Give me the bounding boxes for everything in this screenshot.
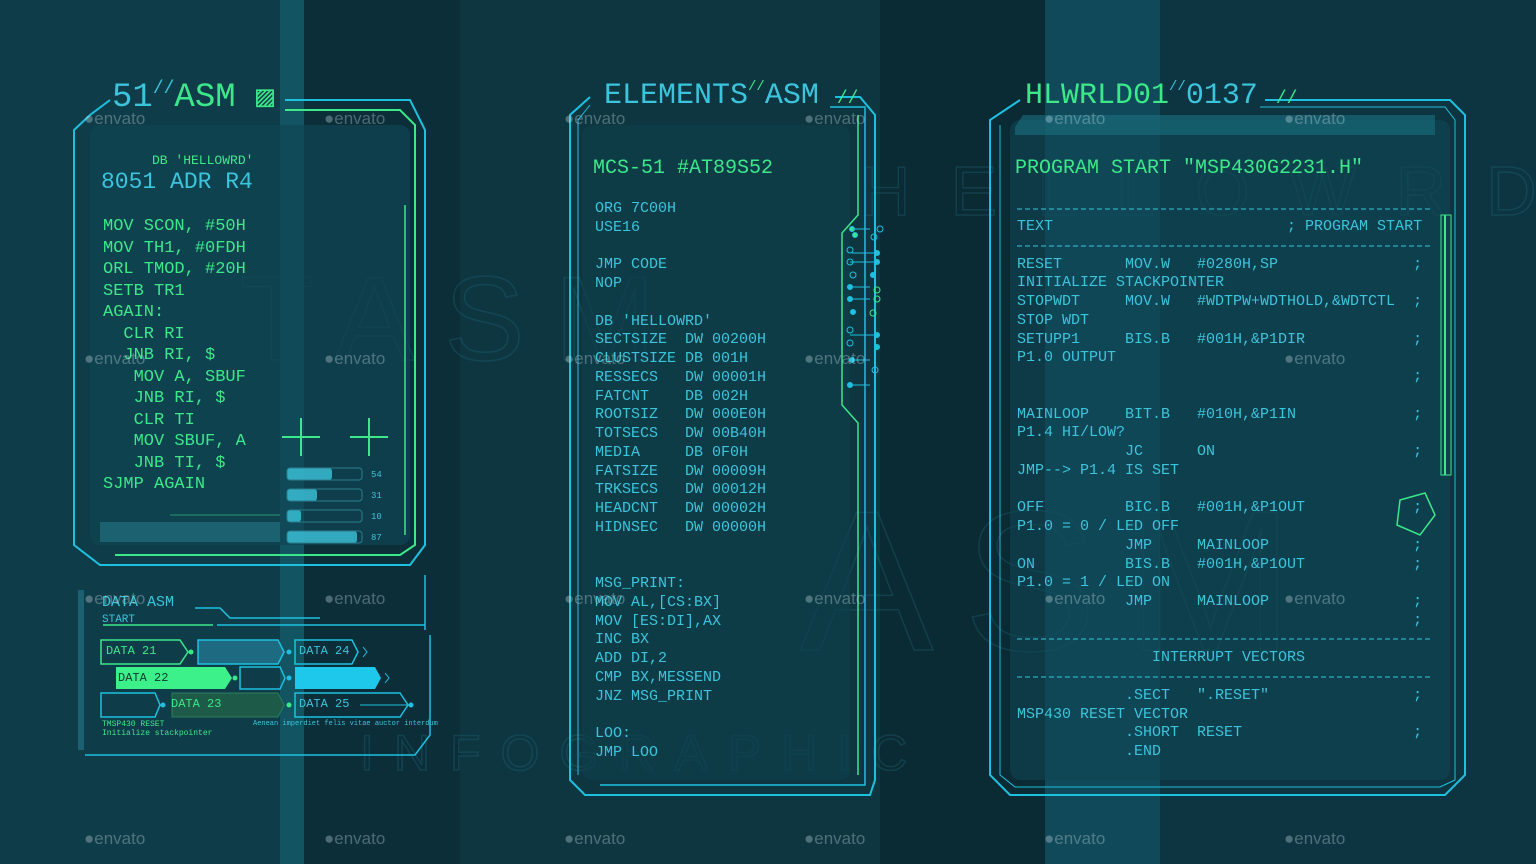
labels: data boxes: DATA 21 [106, 644, 156, 658]
watermarks: ●envato [564, 589, 625, 608]
watermarks: ●envato [1044, 829, 1105, 848]
panel: data asm: DATA 22 [118, 671, 168, 685]
watermarks: ●envato [324, 349, 385, 368]
watermarks: ●envato [84, 349, 145, 368]
text: program start: PROGRAM START "MSP430G2231.H" [1015, 157, 1363, 180]
watermarks: ●envato [804, 829, 865, 848]
watermarks: ●envato [804, 109, 865, 128]
watermarks: ●envato [324, 589, 385, 608]
watermarks: ●envato [564, 349, 625, 368]
watermarks: ●envato [324, 829, 385, 848]
text: data asm title: DATA ASM START [102, 594, 174, 626]
panel: 51 ASM: 54 [371, 470, 382, 480]
panel: elements asm [569, 79, 884, 796]
panel: data asm: DATA 24 [299, 644, 349, 658]
watermarks: ●envato [804, 349, 865, 368]
text: mcs-51: MCS-51 #AT89S52 [593, 157, 773, 180]
panel: 51 ASM: 8051 ADR R4 [101, 169, 253, 195]
panel: 51 ASM: 10 [371, 512, 382, 522]
watermarks: ●envato [564, 109, 625, 128]
panel: hlwrld [989, 79, 1466, 796]
watermarks: ●envato [84, 829, 145, 848]
watermarks: ●envato [1044, 589, 1105, 608]
code: msp430: TEXT ; PROGRAM START RESET MOV.W #0280H,SP ; INITIALIZE STACKPOINTER STOPWDT MOV.W #WDTPW+WDTHOLD,&WDTCTL ; STOP WDT SETUPP1 BIS.B #001H,&P1DIR ; P1.0 OUTPUT ; MAINLOOP BIT.B #010H,&P1IN ; P1.4 HI/LOW? JC ON ; JMP--> P1.4 IS SET OFF BIC.B #001H,&P1OUT ; P1.0 = 0 / LED OFF JMP MAINLOOP ; ON BIS.B #001H,&P1OUT ; P1.0 = 1 / LED ON JMP MAINLOOP ; ; INTERRUPT VECTORS .SECT ".RESET" ; MSP430 RESET VECTOR .SHORT RESET ; .END [1017, 218, 1422, 760]
panel: data asm: Aenean imperdiet felis vitae auctor interdum [253, 720, 438, 728]
background stripes: INFOGRAPHIC [360, 725, 927, 781]
panel: data asm: TMSP430 RESET Initialize stackpointer [102, 720, 212, 738]
panel: 51 ASM: 31 [371, 491, 382, 501]
text: header: DB 'HELLOWRD' [152, 153, 253, 168]
watermarks: ●envato [324, 109, 385, 128]
panel: data asm [78, 575, 438, 756]
title: elements asm: ELEMENTS//ASM // [604, 79, 858, 113]
watermarks: ●envato [564, 829, 625, 848]
watermarks: ●envato [1284, 349, 1345, 368]
background stripes: ASM [800, 470, 1323, 693]
panel: data asm: DATA 23 [171, 697, 221, 711]
watermarks: ●envato [1284, 829, 1345, 848]
panel: 51 ASM: 87 [371, 533, 382, 543]
background stripes: TASM [240, 252, 684, 386]
title: 51 ASM: 51//ASM ▨ [112, 79, 274, 117]
watermarks: ●envato [84, 589, 145, 608]
panel: 51 ASM [73, 79, 426, 566]
title: hlwrld: HLWRLD01//0137 // [1025, 79, 1297, 113]
watermarks: ●envato [1284, 109, 1345, 128]
watermarks: ●envato [1284, 589, 1345, 608]
watermarks: ●envato [1044, 109, 1105, 128]
code: elements: ORG 7C00H USE16 JMP CODE NOP DB 'HELLOWRD' SECTSIZE DW 00200H CLUSTSIZE DB 001H RESSECS DW 00001H FATCNT DB 002H ROOTSIZ DW 000E0H TOTSECS DW 00B40H MEDIA DB 0F0H FATSIZE DW 00009H TRKSECS DW 00012H HEADCNT DW 00002H HIDNSEC DW 00000H MSG_PRINT: MOV AL,[CS:BX] MOV [ES:DI],AX INC BX ADD DI,2 CMP BX,MESSEND JNZ MSG_PRINT LOO: JMP LOO [595, 200, 766, 761]
watermarks: ●envato [804, 589, 865, 608]
watermarks: ●envato [84, 109, 145, 128]
panel: data asm: DATA 25 [299, 697, 349, 711]
code: 51 asm: MOV SCON, #50H MOV TH1, #0FDH ORL TMOD, #20H SETB TR1 AGAIN: CLR RI JNB RI, $ MOV A, SBUF JNB RI, $ CLR TI MOV SBUF, A JNB TI, $ SJMP AGAIN [103, 217, 246, 494]
